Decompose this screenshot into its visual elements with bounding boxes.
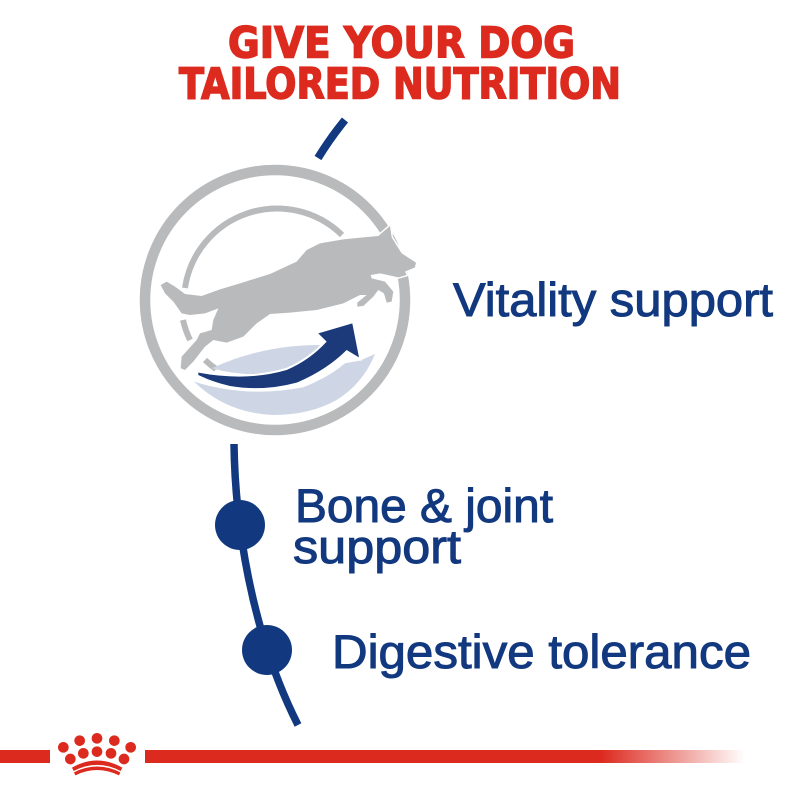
title: GIVE YOUR DOG: [228, 18, 575, 68]
icon: royal crown: [58, 733, 136, 775]
label: digestive tolerance: Digestive tolerance: [332, 625, 751, 678]
inner arc: [183, 209, 342, 369]
bowl: upper part: [212, 345, 320, 374]
bowl: lower part: [194, 354, 375, 415]
timeline segment: top: [318, 120, 345, 158]
label: bone and joint support: support: [293, 520, 461, 573]
label: bone and joint support: Bone & joint: [295, 479, 553, 532]
timeline dot: digestive tolerance: [242, 625, 292, 675]
upward arrow: [198, 323, 359, 388]
title: [179, 18, 621, 110]
timeline dot: bone and joint: [215, 500, 265, 550]
label: bone and joint support: [293, 479, 553, 573]
timeline segment: bottom: [234, 444, 298, 725]
title: TAILORED NUTRITION: [179, 60, 621, 110]
dog silhouette: [161, 226, 416, 370]
label: vitality support: Vitality support: [453, 273, 773, 326]
footer bar: left: [0, 750, 50, 763]
icon: vitality badge: [145, 170, 416, 430]
outer ring: [145, 170, 405, 430]
footer bar: right fading: [145, 750, 745, 763]
